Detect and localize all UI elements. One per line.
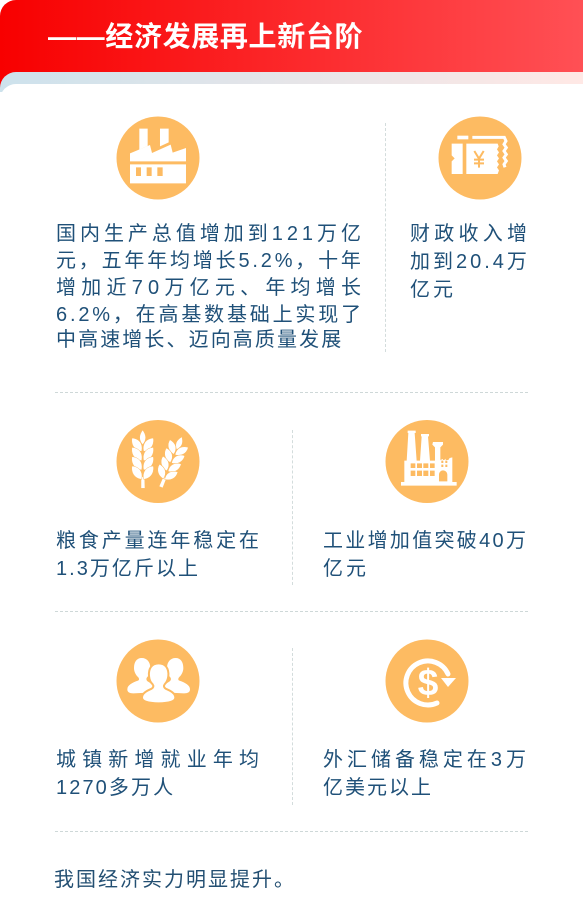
text: industry: 亿元 [323,558,369,580]
icon: factory [116,116,200,200]
icon: dollar circular arrow [386,640,468,722]
text: grain [56,530,262,580]
text: fiscal revenue: 加到20.4万 [410,251,530,273]
text: GDP: 国内生产总值增加到121万亿 [56,223,365,245]
text: fiscal revenue: 亿元 [410,279,456,301]
text: employment: 1270多万人 [56,777,175,799]
text: GDP: 6.2%，在高基数基础上实现了 [56,304,364,326]
text: GDP: 元，五年年均增长5.2%，十年 [56,250,364,272]
icon: people [116,640,200,722]
text: foreign reserves [323,749,530,799]
text: GDP: 增加近70万亿元、年均增长 [56,277,366,299]
title: ——经济发展再上新台阶 [48,21,363,52]
text: foreign reserves: 亿美元以上 [323,777,433,799]
text: GDP [56,223,366,351]
icon: ticket with yen [438,116,522,200]
text: employment: 城镇新增就业年均 [56,749,265,771]
text: foreign reserves: 外汇储备稳定在3万 [323,749,530,771]
icon: wheat [116,420,200,503]
text: grain: 1.3万亿斤以上 [56,558,200,580]
text: grain: 粮食产量连年稳定在 [56,530,262,552]
text: GDP: 中高速增长、迈向高质量发展 [56,329,343,351]
header ribbon band [0,72,583,92]
header banner [0,0,583,90]
text: fiscal revenue: 财政收入增 [410,223,531,245]
text: employment [56,749,265,799]
text: industry [323,530,528,580]
text: fiscal revenue [410,223,531,301]
icon: dollar circular arrow: $ [418,662,439,703]
text: conclusion: 我国经济实力明显提升。 [54,869,296,891]
icon: industrial plant [386,420,468,503]
text: industry: 工业增加值突破40万 [323,530,528,552]
